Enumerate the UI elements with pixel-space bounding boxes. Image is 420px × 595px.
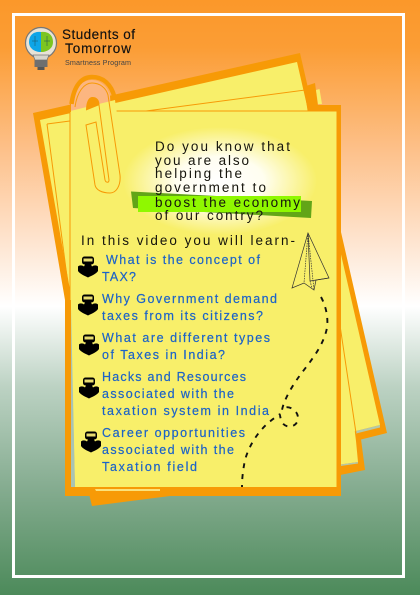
item text: What are different types [102,331,270,345]
list item 2 [78,292,277,323]
icon: book reader [79,334,99,356]
item text: What is the concept of [106,253,261,267]
heading: in this video: In this video you will learn- [81,233,295,248]
item text [102,292,277,323]
icon: paper plane [292,233,329,290]
logo title: Students of [62,27,135,42]
question text: you are also [155,153,249,168]
icon: book reader [78,256,98,278]
item text [102,253,261,284]
icon: light bulb with brain [26,28,56,70]
front sheet orange border [65,105,341,496]
list item 3 [79,331,270,362]
question text: government to [155,180,266,195]
item text: taxation system in India [102,404,269,418]
logo title: Tomorrow [65,41,131,56]
icon: book reader [81,432,101,452]
highlight: bright green bar [138,196,301,212]
highlight: dark green stroke [131,192,312,218]
sheet two orange border [300,83,365,475]
sheet one shadow [356,425,380,434]
clip band showing through [86,97,100,110]
item text: of Taxes in India? [102,348,225,362]
list item 4 [79,370,269,418]
item text [102,370,269,418]
sheet one yellow [40,62,380,487]
clip interior background [71,80,111,112]
icon: book reader [78,294,98,316]
clip outer thick arc [72,77,114,104]
item text: associated with the [102,443,234,457]
item text: Career opportunities [102,426,245,440]
item text: associated with the [102,387,234,401]
list item 5 [81,426,245,474]
logo title [62,27,135,56]
item text [102,331,270,362]
panel: stacked sticky notes [33,53,387,506]
item text: Hacks and Resources [102,370,246,384]
item text: Taxation field [102,460,197,474]
sheet behind bottom edge [88,488,170,506]
glow behind question [123,127,317,235]
item text: TAX? [102,270,136,284]
clip wire line [70,83,120,193]
sheet two pale corner [316,89,322,104]
sheet two yellow [330,240,358,465]
sheet one orange border [33,53,387,480]
item text [102,426,245,474]
sheet two outline [47,90,356,433]
logo tagline: Smartness Program [65,58,131,67]
front sheet yellow [70,111,337,487]
front sheet outline [70,111,337,487]
front sheet shadow strip [71,307,75,487]
sheet two left outline [47,124,70,300]
pale strip at bottom edge [95,489,160,491]
list item 1 [78,253,261,284]
question text: boost the economy [155,195,300,210]
paperclip [70,77,120,193]
sheet two shadow [337,462,358,466]
logo [26,27,135,70]
icon: book reader [79,378,99,398]
question text: of our contry? [155,208,263,223]
question text [155,139,300,223]
item text: Why Government demand [102,292,277,306]
question text: helping the [155,166,242,181]
question text: Do you know that [155,139,290,154]
arrow: dashed flight path [242,297,327,487]
clip interior yellow [70,100,117,114]
item text: taxes from its citizens? [102,309,263,323]
